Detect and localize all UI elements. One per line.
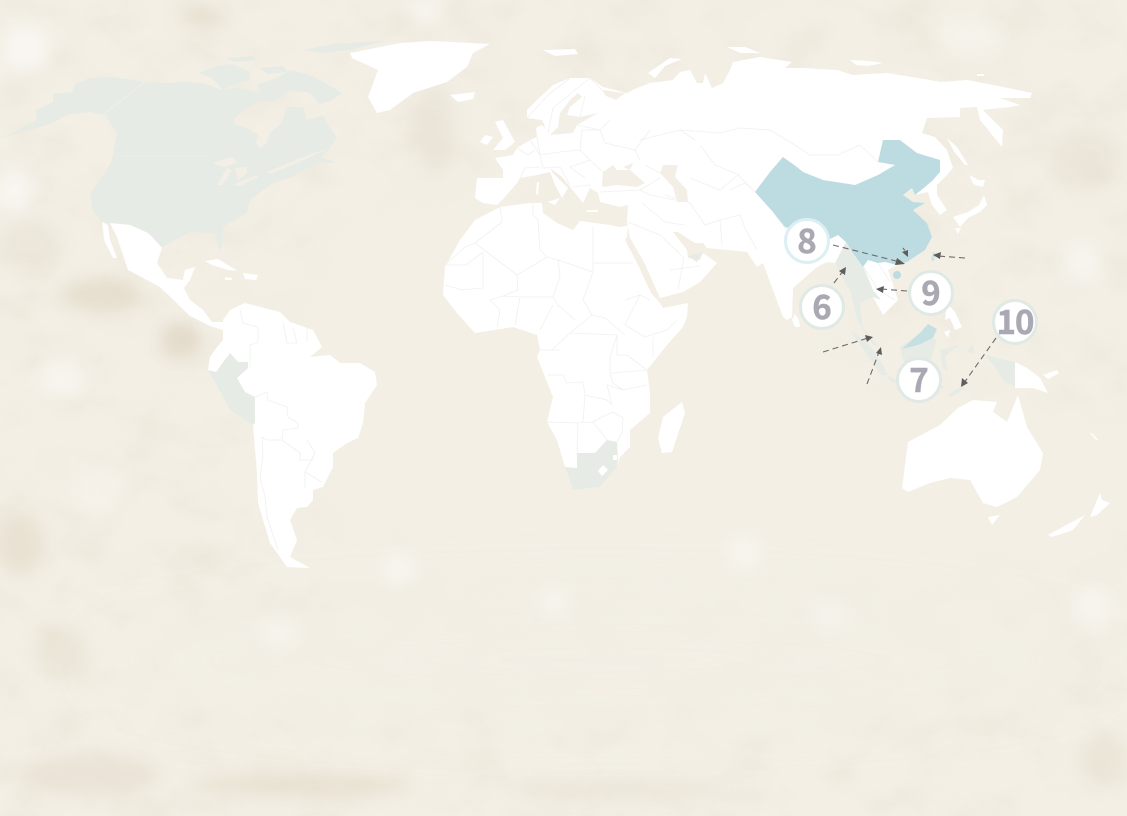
marker: 8: 8 xyxy=(797,215,817,263)
marker: 10: 10 xyxy=(997,296,1034,344)
marker: 6 xyxy=(800,281,844,329)
arrow: 6 to Myanmar xyxy=(834,267,846,283)
arrow: short to southern China xyxy=(902,248,908,257)
marker: 7: 7 xyxy=(909,354,929,402)
arrow: 9 to Laos xyxy=(876,286,907,293)
map: Africa with South Africa highlighted xyxy=(443,203,688,490)
arrow: 10 to Timor xyxy=(961,338,996,387)
map: New Guinea east, Australia, New Zealand xyxy=(902,362,1110,537)
map: Southeast Asia islands, highlighted xyxy=(850,324,1015,397)
arrow: 8 to southern China xyxy=(833,245,905,265)
map: Eurasia xyxy=(475,57,1032,347)
map: North America, highlighted xyxy=(2,41,385,252)
marker: 9: 9 xyxy=(921,267,941,315)
arrow: to Malay Peninsula xyxy=(823,335,873,352)
map: Arctic islands xyxy=(543,47,984,78)
map: UK, Ireland and Mediterranean islands xyxy=(480,120,598,212)
marker: 8 xyxy=(786,215,828,263)
marker: 6: 6 xyxy=(812,281,832,329)
map: Greenland and Iceland xyxy=(350,41,490,113)
marker: 9 xyxy=(910,267,952,315)
map: Taiwan, Japan, Sakhalin, Philippines, Sri Lanka xyxy=(792,138,987,338)
lakes and St Lawrence xyxy=(213,147,332,186)
inland seas xyxy=(550,90,688,202)
marker: 7 xyxy=(898,354,940,402)
map: Mexico, Central America and Caribbean xyxy=(102,222,258,330)
arrow: to Malaysia xyxy=(867,347,882,384)
arrow: to Taiwan xyxy=(933,252,965,259)
map: South America with Peru highlighted xyxy=(208,303,377,568)
map: China, highlighted xyxy=(755,140,940,279)
